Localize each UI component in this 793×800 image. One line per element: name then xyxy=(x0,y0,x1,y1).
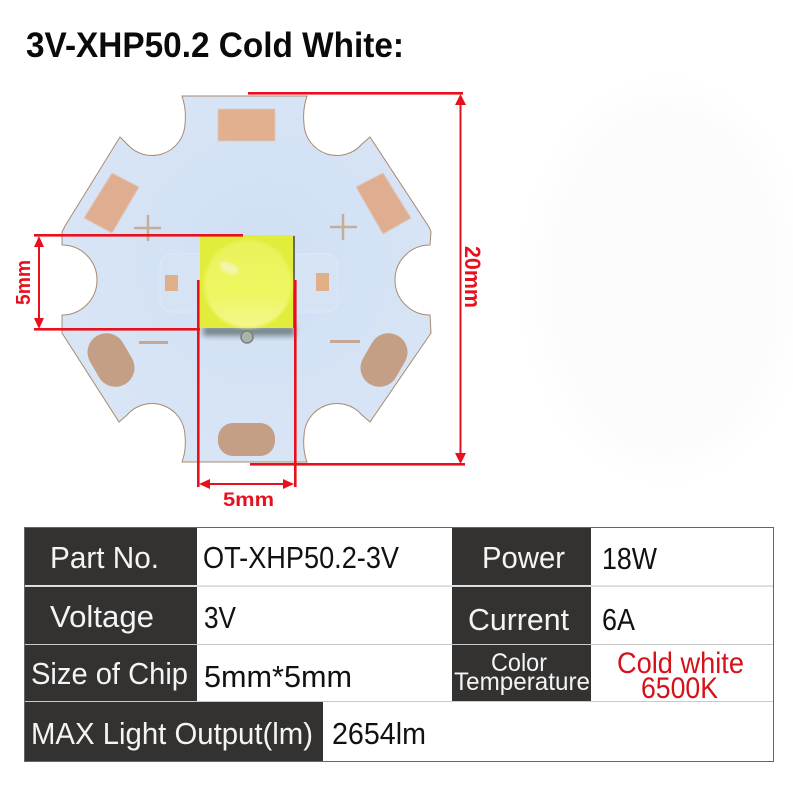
dimension: 5mm bottom xyxy=(197,280,297,511)
label cells xyxy=(25,528,591,761)
row: chip size and color temperature xyxy=(31,647,744,705)
row: voltage and current: 3V xyxy=(204,600,236,635)
dimension: 5mm bottom: 5mm xyxy=(223,490,274,511)
row: chip size and color temperature: Cold white xyxy=(617,647,744,680)
row: chip size and color temperature: 6500K xyxy=(641,672,718,705)
copper pad: upper right xyxy=(356,173,411,234)
minus mark left xyxy=(139,341,168,344)
plus mark right xyxy=(330,214,357,240)
board outline xyxy=(62,96,431,462)
dimension: 5mm left: 5mm xyxy=(13,260,35,305)
row: part no and power: OT-XHP50.2-3V xyxy=(203,540,399,575)
background glow xyxy=(535,90,793,470)
chip connector xyxy=(241,331,253,343)
dimension: 20mm: 20mm xyxy=(460,246,485,308)
row: voltage and current: Current xyxy=(468,602,569,637)
specification table xyxy=(24,528,774,762)
plus mark left xyxy=(134,215,161,241)
row dividers xyxy=(25,586,773,702)
row: part no and power: Part No. xyxy=(50,540,159,575)
copper pad: top xyxy=(218,109,275,141)
row: chip size and color temperature: Color xyxy=(491,649,547,677)
row: chip size and color temperature: Size of Chip xyxy=(31,656,188,691)
row: part no and power xyxy=(50,540,658,576)
solder outline xyxy=(160,254,338,312)
star LED board xyxy=(62,96,431,462)
row: part no and power: Power xyxy=(482,540,565,575)
small pad right xyxy=(316,273,329,291)
small pad left xyxy=(165,275,178,291)
LED dome xyxy=(204,240,292,328)
title: 3V-XHP50.2 Cold White: xyxy=(26,26,404,65)
row: voltage and current: Voltage xyxy=(50,599,154,634)
row: chip size and color temperature: Temperature xyxy=(454,668,590,696)
row: part no and power: 18W xyxy=(602,541,658,576)
row: max light output: 2654lm xyxy=(332,716,426,751)
row: max light output: MAX Light Output(lm) xyxy=(31,716,313,751)
LED chip xyxy=(200,235,295,328)
row: chip size and color temperature: 5mm*5mm xyxy=(204,659,352,694)
table background xyxy=(24,528,774,762)
row: voltage and current: 6A xyxy=(602,602,635,637)
dimension: 20mm xyxy=(248,92,485,466)
chip shadow xyxy=(203,326,295,336)
copper pad: upper left xyxy=(84,173,139,233)
row: voltage and current xyxy=(50,599,635,637)
copper pad: bottom xyxy=(218,423,275,456)
copper pad: lower right xyxy=(354,326,414,394)
minus mark right xyxy=(330,340,360,343)
copper pad: lower left xyxy=(81,326,141,394)
dimension: 5mm left xyxy=(13,234,243,331)
